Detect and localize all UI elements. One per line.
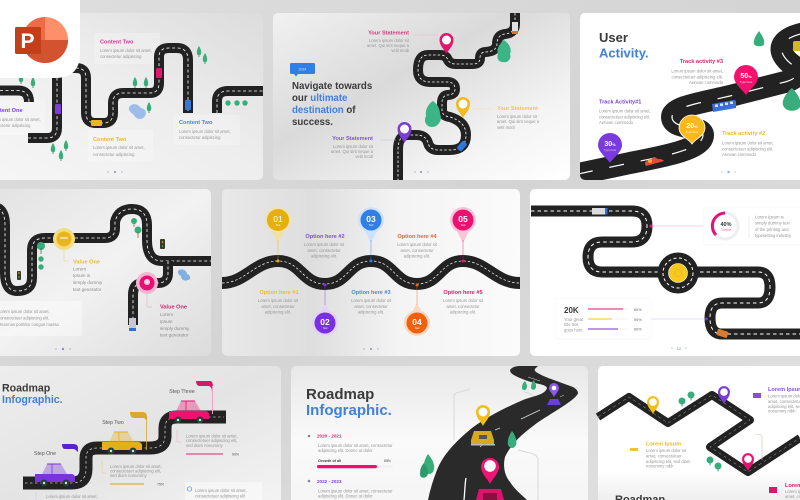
road main (0, 208, 211, 291)
road (531, 211, 800, 334)
yellow note: adipiscing elit, sed diam (646, 459, 691, 464)
milestone 2020: adipiscing elit. Donec ut dolor (318, 448, 373, 453)
stats card (555, 298, 651, 339)
label: content two yellow (93, 137, 145, 157)
value one yellow: Lorem (73, 266, 86, 272)
value one yellow (73, 260, 103, 292)
option 4: amet, consectetur (400, 248, 434, 253)
badge (290, 63, 315, 76)
panel: user activity (578, 13, 800, 180)
statement: top: amet. Qui sint neque a (367, 43, 410, 48)
track 1: Aenean commodo (599, 120, 634, 125)
title: Roadmap (306, 386, 374, 403)
road: left stub (0, 90, 29, 102)
title (599, 30, 649, 60)
info card (185, 482, 262, 500)
label: content two pink: Content Two (100, 40, 134, 46)
milestone 2020: 2020 - 2021 (317, 434, 342, 438)
flag purple (62, 444, 78, 452)
car pink (169, 401, 209, 424)
title: Activity. (599, 46, 649, 60)
track 1: Lorem ipsum dolor sit amet, (599, 108, 651, 114)
option 1: Lorem ipsum dolor sit (258, 298, 299, 303)
road markings (464, 377, 564, 500)
track 1 (599, 100, 651, 125)
panel: roundabout road (530, 189, 800, 356)
step two note: Lorem ipsum dolor sit amet, (110, 464, 162, 469)
pager (414, 171, 429, 173)
panel: roadmap perspective road (291, 366, 588, 500)
option 2: adipiscing elit. (311, 254, 337, 258)
yellow note: nonummy nibh (646, 464, 674, 468)
pin pink (440, 33, 454, 54)
milestone 2022: adipiscing elit. Donec ut dolor (318, 494, 373, 498)
marker 01: 01 (273, 214, 283, 224)
road (398, 13, 515, 180)
track 3: consectetuer adipiscing elit. (672, 74, 723, 80)
option 1: amet, consectetur (261, 304, 295, 309)
headline: our ultimate (292, 93, 348, 104)
taxi (471, 431, 495, 446)
panel: wave road options (222, 189, 520, 356)
pin purple (398, 122, 412, 143)
road branch (133, 261, 168, 325)
dots (225, 100, 248, 106)
yellow note: Lorem Ipsum (646, 442, 681, 448)
stats card: 20K (564, 306, 579, 315)
marker 01: Text (276, 224, 281, 227)
title: Infographic. (2, 394, 63, 406)
marker 04: 04 (412, 317, 422, 327)
track 2: Track activity #2 (722, 131, 765, 137)
option 2 (304, 234, 345, 258)
donut card: simply dummy text (755, 220, 791, 226)
stats card: Your great (564, 317, 584, 322)
option 5: Lorem ipsum dolor sit (443, 298, 484, 303)
step labels: Step Three (169, 389, 195, 395)
donut card: Lorem Ipsum is (755, 214, 784, 220)
marker 03 (358, 207, 384, 262)
step three note (177, 430, 239, 456)
pink car (476, 489, 504, 500)
leafy trees (425, 40, 511, 127)
option 3 (351, 290, 392, 314)
pager (721, 171, 736, 173)
connectors (64, 250, 152, 307)
milestone 2022 (308, 479, 393, 498)
value one pink: simply dummy (160, 326, 190, 331)
headline: success. (292, 117, 333, 128)
perspective road (428, 366, 578, 500)
step three note: Lorem ipsum dolor sit amet, (186, 434, 238, 438)
value one pink: Lorem (160, 312, 173, 317)
track 2 (722, 131, 774, 157)
yellow note: amet, consectetuer (646, 454, 682, 458)
pager (55, 348, 71, 350)
label: content two blue: Content Two (179, 120, 213, 126)
headline: destination of (292, 105, 356, 116)
option 2: amet, consectetur (307, 248, 341, 253)
statement: right: amet. Qui sint neque a (497, 119, 540, 124)
label: content two pink (100, 40, 152, 59)
pin yellow (647, 396, 659, 414)
statement: left: Your Statement (332, 136, 373, 142)
milestone 2020 (308, 434, 393, 468)
option 5: Option here #5 (443, 290, 483, 296)
milestone 2020: Lorem ipsum dolor sit amet, consectetur (318, 443, 393, 448)
option 1: Option here #1 (259, 290, 299, 296)
pin pink (481, 458, 499, 484)
label: content two blue: Lorem ipsum dolor sit amet, (179, 129, 231, 134)
wave road (222, 261, 520, 284)
marker 02 (312, 284, 338, 336)
powerpoint badge (0, 0, 80, 78)
car purple (35, 464, 75, 486)
connector purple (651, 318, 708, 320)
purple car (547, 399, 561, 405)
label: content two yellow: Content Two (93, 137, 127, 143)
pin purple (718, 386, 730, 404)
title: Roadmap (2, 382, 51, 394)
donut card: 40% (720, 222, 732, 228)
title (2, 382, 63, 406)
truck (129, 318, 136, 331)
statement: right (497, 106, 540, 130)
statement: right: Lorem ipsum dolor sit (497, 114, 538, 119)
marker 03: Text (369, 224, 374, 227)
pin 30%: 30% (604, 141, 616, 148)
pager (107, 171, 123, 173)
stats card: 80% (634, 308, 642, 312)
value one pink: Ipsum (160, 319, 173, 324)
option 3: adipiscing elit. (358, 310, 384, 314)
step three note: consectetuer adipiscing elit, (186, 438, 237, 443)
pager (363, 348, 379, 350)
option 4: Option here #4 (397, 234, 437, 240)
purple note: nonummy nibh (768, 408, 796, 414)
stats card: goes here (564, 328, 583, 332)
headline: Navigate towards (292, 81, 372, 92)
step labels (34, 389, 195, 457)
panel: curvy road with content notes (0, 13, 263, 180)
label: content two pink: Lorem ipsum dolor sit amet, (100, 48, 152, 53)
road (23, 417, 226, 483)
track 2: Aenean commodo (722, 152, 757, 157)
option 3: Option here #3 (351, 290, 391, 296)
lamp (755, 434, 762, 460)
wide road (578, 33, 800, 174)
option 3: Lorem ipsum dolor sit (351, 298, 392, 303)
pin 50% (734, 65, 758, 95)
pager (671, 346, 687, 351)
track 3: Aenean commodo (689, 80, 724, 85)
pin 30%: Type here (604, 148, 617, 152)
pink node (136, 272, 158, 294)
pin 20%: 20% (686, 123, 698, 130)
marker 05 (450, 207, 476, 262)
option 1: adipiscing elit. (265, 310, 291, 314)
value one yellow: simply dummy (73, 280, 103, 285)
panel: navigate towards destination (273, 13, 570, 180)
pin purple (549, 383, 559, 397)
badge: 2024 (299, 68, 306, 72)
info card: consectetuer adipiscing elit (195, 494, 246, 498)
label: content two blue (179, 120, 231, 140)
trees (420, 380, 536, 478)
track 1: consectetuer adipiscing elit. (599, 114, 650, 120)
donut card (703, 207, 800, 245)
car (645, 158, 664, 166)
panel: value one road (0, 189, 211, 356)
powerpoint logo: P (20, 30, 35, 53)
track 3: Lorem ipsum dolor sit amet, (671, 68, 723, 74)
donut card: of the printing and (755, 227, 789, 232)
trees (19, 46, 207, 161)
info card: Lorem ipsum dolor sit amet, (195, 488, 247, 493)
value one yellow: Value One (73, 260, 100, 266)
text card (0, 301, 82, 336)
option 4 (397, 234, 438, 258)
title: Infographic. (306, 402, 392, 419)
trees (754, 31, 800, 111)
traffic lights (17, 239, 165, 280)
statement: right: velit modi (497, 125, 515, 130)
option 5: adipiscing elit. (450, 310, 476, 314)
value one pink: Value One (160, 304, 187, 310)
marker 01 (265, 207, 291, 262)
step two note: consectetuer adipiscing elit, (110, 468, 161, 474)
track 2: Lorem ipsum dolor sit amet, (722, 140, 774, 146)
road (598, 395, 800, 472)
pin 20% (679, 115, 705, 144)
yellow note: Lorem ipsum dolor sit (646, 448, 687, 453)
bus (712, 100, 736, 112)
stats card: title text (564, 322, 579, 327)
statement: top: velit modi (391, 48, 409, 53)
vehicle white truck (592, 208, 608, 214)
pin 30% (598, 133, 622, 163)
pin pink (742, 453, 754, 471)
statement: top: Your Statement (368, 30, 409, 36)
option 5: amet, consectetur (446, 304, 480, 309)
option 4: adipiscing elit. (404, 254, 430, 258)
note cards (0, 33, 240, 162)
marker 05: 05 (458, 214, 468, 224)
marker 05: Text (461, 224, 466, 227)
marker 04: Text (415, 327, 420, 330)
milestone 2020: Growth of all (318, 459, 341, 463)
label: content one (0, 108, 41, 128)
headline (292, 81, 372, 128)
option 1 (258, 290, 299, 314)
statement: left: velit modi (355, 154, 373, 159)
step three note: sed diam nonummy (186, 443, 223, 448)
road: main winding section (28, 48, 188, 138)
statement: top (367, 30, 410, 53)
yellow note (627, 441, 691, 468)
road: right section (217, 91, 263, 113)
pin 50%: 50% (740, 73, 752, 80)
label: content two yellow: consectetur adipiscing (93, 152, 135, 157)
value one yellow: Ipsum is (73, 273, 91, 278)
pin 50%: Type here (740, 80, 753, 84)
donut card: Subtitle (721, 228, 732, 232)
track 1: Track Activity#1 (599, 100, 641, 106)
connectors (380, 35, 493, 140)
pager: 12 (677, 346, 682, 351)
trees and dots (37, 218, 142, 270)
track 3: Track activity #3 (680, 59, 723, 65)
milestone 2022: 2022 - 2023 (317, 479, 342, 484)
car yellow (102, 432, 142, 454)
step three note: 90% (232, 452, 239, 456)
yellow node (53, 228, 75, 250)
label: content two pink: consectetur adipiscing (100, 54, 142, 59)
pin yellow (456, 97, 470, 118)
lake (178, 269, 190, 281)
track 2: consectetuer adipiscing elit. (722, 146, 773, 152)
flag yellow (130, 412, 147, 450)
option 2: Option here #2 (305, 234, 345, 240)
step labels: Step One (34, 451, 56, 457)
pin 20%: Type here (686, 130, 699, 134)
panel: roadmap steps with cars (0, 366, 281, 500)
lake (129, 104, 146, 119)
marker 02: 02 (320, 317, 330, 327)
statement: top: Lorem ipsum dolor sit (369, 38, 410, 43)
lamp posts (454, 389, 538, 500)
statement: left: amet. Qui sint neque a (331, 149, 374, 154)
yellow car (793, 41, 800, 51)
step one note (36, 492, 98, 500)
option 3: amet, consectetur (354, 304, 388, 309)
title: User (599, 30, 628, 45)
milestone 2022: Lorem ipsum dolor sit amet, consectetur (318, 488, 393, 494)
statement: left: Lorem ipsum dolor sit (333, 144, 374, 149)
value one pink (160, 304, 190, 338)
step two note (102, 461, 164, 486)
pink note (769, 483, 800, 499)
vehicle orange (716, 329, 729, 338)
value one pink: text generator (160, 332, 189, 338)
title (306, 386, 392, 419)
option 4: Lorem ipsum dolor sit (397, 242, 438, 247)
track 3 (671, 59, 724, 85)
label: content two blue: consectetur adipiscing (179, 135, 221, 140)
vehicles (456, 22, 518, 152)
purple note (750, 386, 800, 414)
stats card: 60% (634, 328, 642, 332)
connector pink (650, 224, 703, 228)
stats card: 90% (634, 318, 642, 322)
trees (678, 392, 722, 472)
statement: left (331, 136, 374, 159)
value one yellow: text generator (73, 287, 102, 292)
pin yellow (476, 405, 490, 426)
step one note: Lorem ipsum dolor sit amet, (46, 494, 98, 499)
option 5 (443, 290, 484, 314)
flag pink (196, 381, 213, 414)
marker 04 (404, 284, 430, 336)
marker 03: 03 (366, 214, 376, 224)
donut card: typesetting industry (755, 233, 792, 238)
panel: angular road with pins (598, 366, 800, 500)
label: content two yellow: Lorem ipsum dolor sit amet, (93, 145, 145, 150)
roundabout (658, 252, 698, 294)
step two note: sed diam nonummy (110, 473, 147, 478)
step two note: 75% (157, 482, 164, 486)
marker 02: Text (323, 327, 328, 330)
statement: right: Your Statement (497, 106, 538, 112)
milestone 2020: 85% (384, 459, 392, 463)
step labels: Step Two (102, 420, 124, 426)
vehicles (55, 68, 191, 126)
option 2: Lorem ipsum dolor sit (304, 242, 345, 247)
